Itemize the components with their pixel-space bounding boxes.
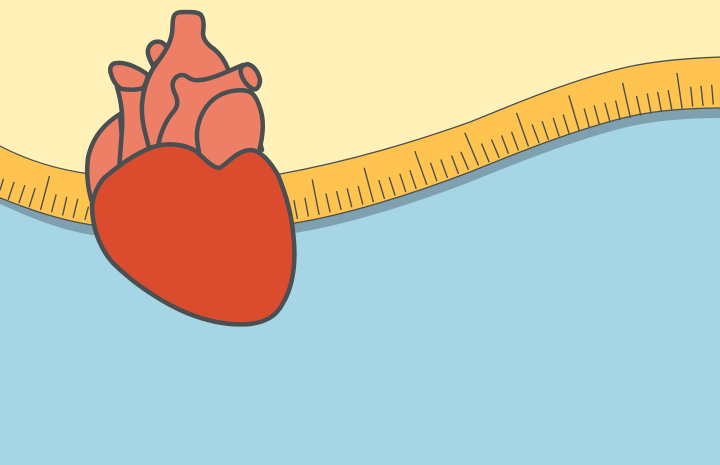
- heart: pulmonary artery outline: [158, 65, 243, 147]
- measuring tape band: [0, 57, 720, 230]
- icon: anatomical heart: [87, 12, 294, 324]
- heart: ventricle: [92, 144, 294, 324]
- heart: right atrium: [197, 90, 263, 178]
- heart: small vessel: [148, 42, 169, 66]
- heart: right atrium outline: [197, 90, 263, 156]
- heart: left atrium: [87, 114, 125, 208]
- heart: aorta and upper body: [142, 12, 262, 152]
- heart: left vessel cap: [110, 63, 148, 90]
- heart: pulmonary artery fill: [158, 65, 250, 150]
- tape tick marks: [0, 73, 713, 219]
- heart: pulmonary artery cap: [241, 64, 260, 89]
- background: blue lower area: [0, 113, 720, 465]
- heart: left vessel tube: [117, 87, 155, 170]
- tape shadow: [0, 108, 720, 240]
